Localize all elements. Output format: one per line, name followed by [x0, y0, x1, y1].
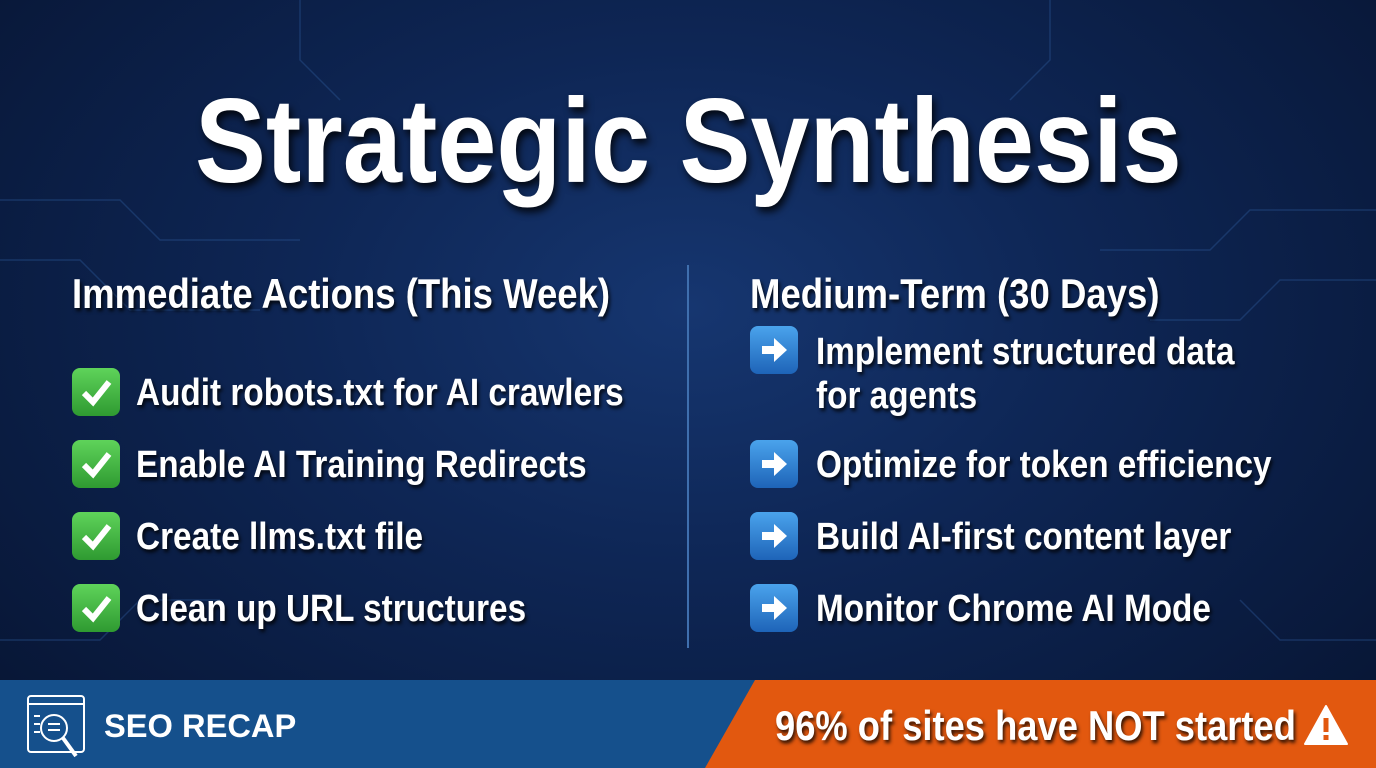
footer brand text: SEO RECAP — [104, 708, 296, 744]
title: Strategic Synthesis — [195, 74, 1182, 208]
item: Chrome AI Mode: Monitor Chrome AI Mode — [816, 588, 1211, 630]
right list — [750, 326, 1274, 632]
item: enable redirects: Enable AI Training Redirects — [136, 444, 587, 486]
item: AI-first layer: Build AI-first content layer — [816, 516, 1231, 558]
item: structured data: Implement structured data — [816, 331, 1235, 373]
item: audit robots: Audit robots.txt for AI crawlers — [136, 372, 624, 414]
callout text: 96% of sites have NOT started — [775, 702, 1296, 749]
heading: immediate actions: Immediate Actions (This Week) — [72, 270, 610, 317]
item: llms.txt: Create llms.txt file — [136, 516, 423, 558]
item: structured data: for agents — [816, 375, 977, 417]
orange callout band — [705, 680, 1376, 768]
icon: SEO logo — [27, 695, 85, 758]
footer — [0, 680, 1376, 768]
left list — [72, 368, 626, 634]
icon: warning — [1304, 705, 1348, 745]
item: token efficiency: Optimize for token efficiency — [816, 444, 1272, 486]
item: structured data — [750, 326, 1238, 421]
heading: medium-term: Medium-Term (30 Days) — [750, 270, 1159, 317]
item: URL structures: Clean up URL structures — [136, 588, 526, 630]
divider — [687, 265, 689, 648]
